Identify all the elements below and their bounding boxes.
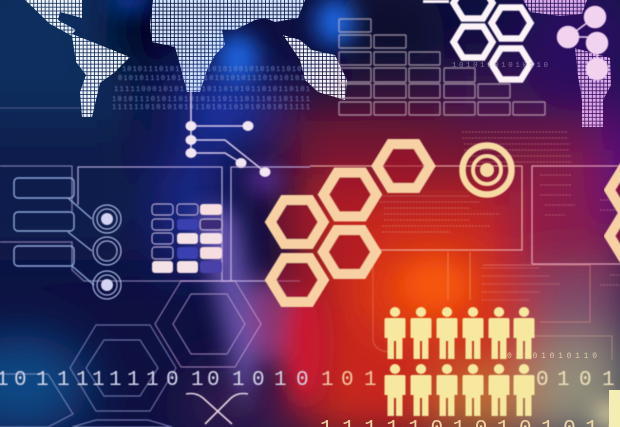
map: right continent top (523, 0, 587, 16)
network nodes and connector lines (186, 90, 270, 177)
world map: dotted continents (25, 0, 611, 127)
small binary text on right: 01101010110 (507, 352, 597, 361)
binary text block: 111111010101010110101101010101011111 (112, 104, 310, 112)
large binary row (0, 369, 615, 392)
binary text block: 101011101011010101110111011101101111 (112, 96, 310, 104)
pink molecule nodes (558, 6, 608, 80)
people icons, lower row (384, 364, 534, 416)
large binary row: 1011111110101010 (0, 369, 309, 392)
button grid (152, 204, 222, 273)
map: eastern landmass (283, 35, 347, 100)
bright corner block (609, 390, 620, 427)
target icon (462, 146, 512, 194)
large binary row: 0101 (536, 369, 615, 392)
cream hexagons at right edge (610, 168, 620, 258)
people icons, upper row (384, 307, 534, 359)
map: left continent (25, 0, 130, 117)
binary label beside hexagons: 10101101010110 (452, 62, 548, 70)
map: right continent lower (575, 48, 611, 127)
binary text block: 010101110101010110101010111010101011 (118, 75, 310, 83)
map: central continents (150, 0, 305, 92)
left panel rounded rows (14, 178, 94, 285)
binary text block (112, 66, 312, 112)
white hexagon cluster (423, 0, 530, 80)
faint data text lines (380, 132, 620, 300)
cream hexagon cluster (270, 144, 430, 302)
binary text block: 111110001010111010110101011010110101 (114, 86, 310, 94)
block grid chart (339, 19, 545, 115)
concentric circle dials (93, 205, 121, 299)
large binary row: 101 (321, 369, 377, 392)
thin outline hexagons (0, 281, 261, 427)
circuit panels outlines (0, 108, 620, 360)
binary text block: 101011101011010110101001010101101010 (122, 66, 312, 74)
X shaped curve (186, 394, 248, 424)
